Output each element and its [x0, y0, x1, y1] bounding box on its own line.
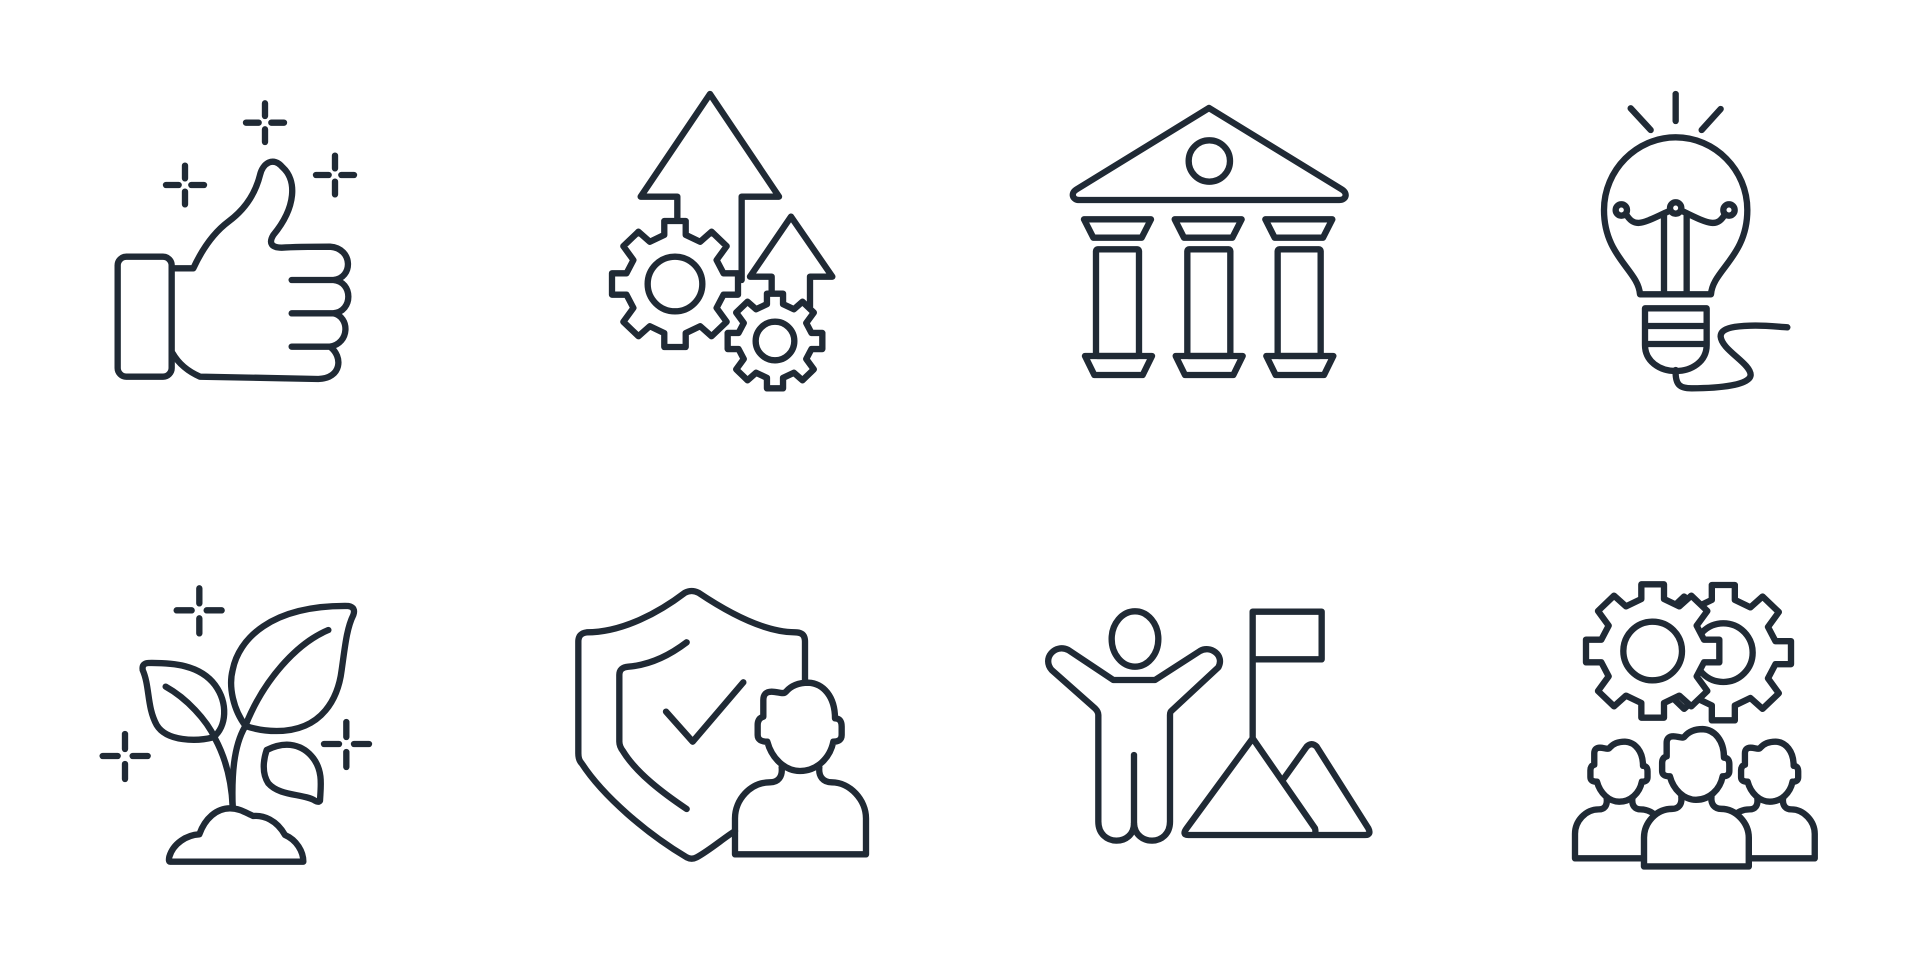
- large arrow: [641, 94, 779, 280]
- head: [1112, 611, 1158, 667]
- cord: [1676, 326, 1787, 388]
- screw base: [1645, 308, 1707, 371]
- filament: [1616, 202, 1735, 294]
- small gear: [728, 294, 822, 388]
- rear mountain: [1284, 744, 1369, 835]
- icon: arrows and gears: [612, 94, 832, 388]
- check mark: [666, 682, 743, 742]
- soil: [169, 808, 303, 862]
- floating leaf: [264, 745, 321, 802]
- left gear: [1586, 584, 1719, 718]
- small arrow: [750, 217, 832, 307]
- body: [1048, 648, 1220, 841]
- left leaf: [143, 663, 224, 740]
- center person: [1644, 729, 1749, 866]
- icon: person and summit flag: [1048, 611, 1369, 841]
- left stem: [166, 687, 233, 807]
- roof medallion: [1189, 140, 1230, 182]
- shield inner: [619, 642, 687, 809]
- icon: team with gears: [1575, 584, 1815, 866]
- icon: shield with person: [578, 591, 866, 859]
- right person: [1726, 742, 1815, 858]
- right gear: [1656, 585, 1791, 720]
- bulb glass: [1604, 137, 1747, 294]
- roof: [1073, 108, 1346, 200]
- main mountain: [1185, 738, 1315, 835]
- icon: growing plant: [103, 588, 369, 862]
- person: [735, 683, 866, 854]
- flag: [1253, 612, 1322, 737]
- sparkles: [103, 588, 369, 779]
- right column: [1265, 219, 1333, 375]
- cuff: [118, 257, 172, 377]
- hand: [173, 162, 348, 379]
- sparkles: [166, 103, 354, 204]
- leg divider: [1124, 755, 1143, 823]
- icon: classical bank building: [1073, 108, 1346, 375]
- left person: [1575, 742, 1664, 858]
- large gear: [612, 221, 738, 347]
- left column: [1084, 219, 1152, 375]
- icon: light bulb: [1604, 94, 1787, 388]
- large stem: [232, 630, 328, 807]
- shield outer: [578, 591, 805, 859]
- icon: thumbs up: [118, 103, 354, 379]
- rays: [1631, 94, 1721, 130]
- large leaf: [231, 606, 354, 731]
- middle column: [1175, 219, 1243, 375]
